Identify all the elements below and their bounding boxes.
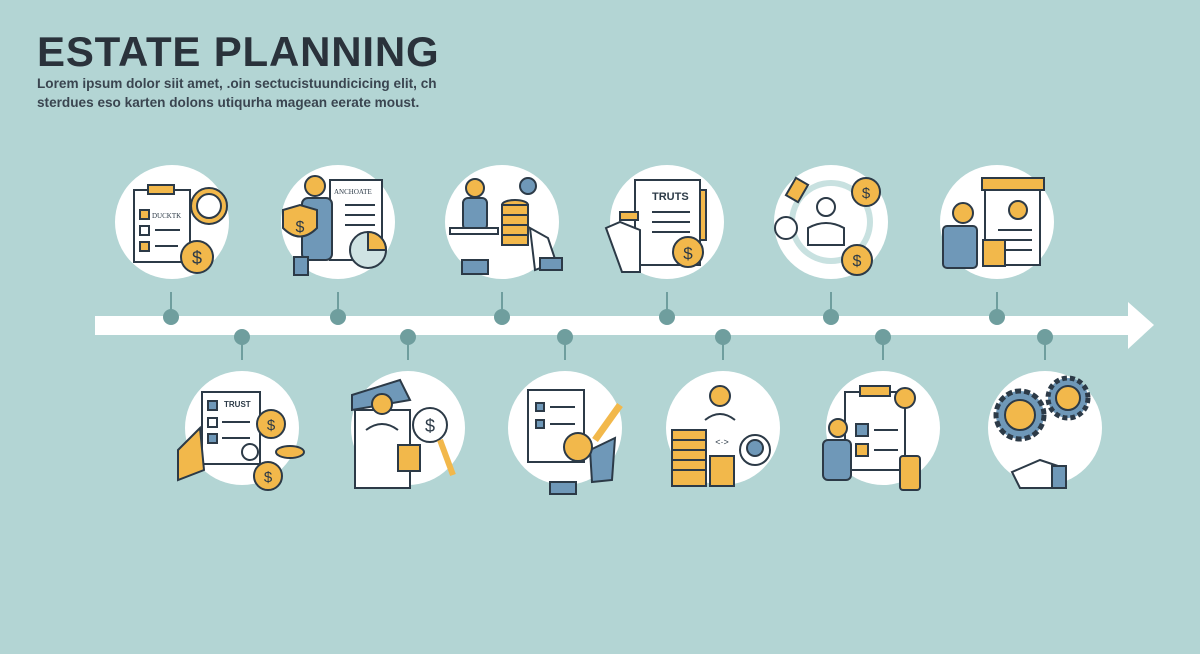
icon 2: executor: ANCHOATE [334, 188, 372, 196]
icon 10: inheritance coins [666, 371, 780, 486]
subtitle text [37, 76, 437, 110]
subtitle text: sterdues eso karten dolons utiqurha magean eerate moust. [37, 95, 419, 110]
icon 1: will checklist [115, 165, 229, 279]
icon 1: will checklist: $ [192, 248, 202, 268]
connectors top [164, 292, 1004, 324]
icon 7: trust checklist with coins [178, 371, 304, 490]
icon 2: executor [281, 165, 395, 279]
title: ESTATE PLANNING [37, 28, 439, 75]
icon 9: signing document [508, 371, 622, 494]
timeline arrow [95, 302, 1154, 349]
icon 6: document with gear [940, 165, 1054, 279]
icon 10: inheritance coins: <·> [715, 437, 729, 447]
icon 5: beneficiary: $ [853, 253, 862, 270]
icon 4: trust document: TRUTS [652, 191, 689, 203]
icon 7: trust checklist with coins: $ [264, 469, 273, 486]
icon 1: will checklist: DUCKTK [152, 212, 181, 220]
icon 4: trust document [606, 165, 724, 279]
icon 7: trust checklist with coins: $ [267, 417, 276, 434]
icon 3: handing assets [445, 165, 562, 279]
icon 12: gears and hand [988, 371, 1102, 488]
connectors bottom [235, 330, 1052, 360]
icon 4: trust document: $ [683, 244, 693, 263]
icon 8: advisor with magnifier [351, 371, 465, 488]
icon 11: checklist with person [823, 371, 940, 490]
icon 5: beneficiary [774, 165, 888, 279]
icon 5: beneficiary: $ [862, 185, 871, 202]
icon 8: advisor with magnifier: $ [425, 416, 435, 436]
subtitle text: Lorem ipsum dolor siit amet, .oin sectucistuundicicing elit, ch [37, 76, 437, 91]
icon 7: trust checklist with coins: TRUST [224, 400, 251, 409]
icon 2: executor: $ [296, 219, 305, 236]
